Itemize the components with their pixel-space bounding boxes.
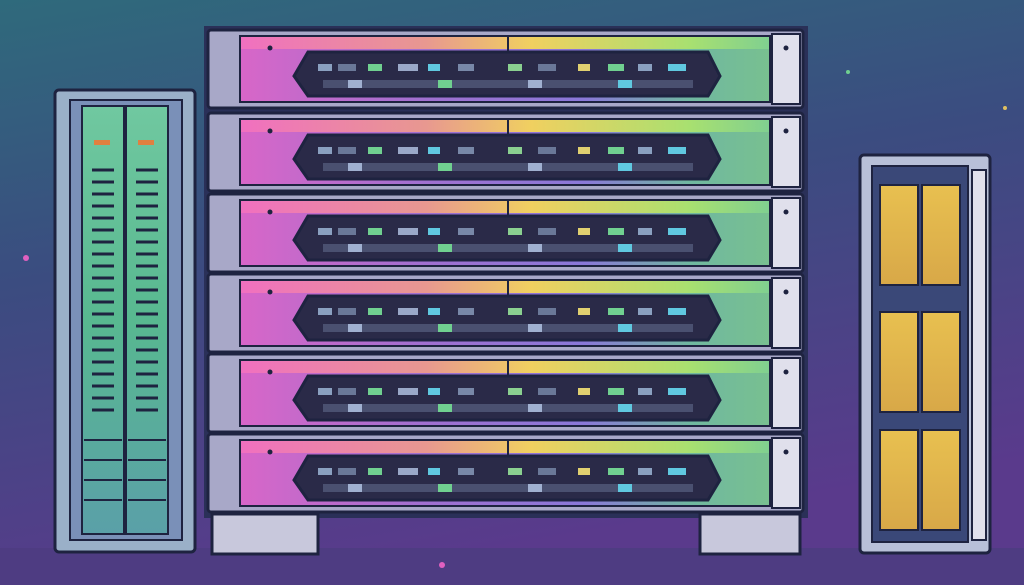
left tower	[55, 90, 195, 552]
rack feet	[212, 514, 800, 554]
center rack	[204, 26, 808, 518]
right tower	[860, 155, 990, 553]
